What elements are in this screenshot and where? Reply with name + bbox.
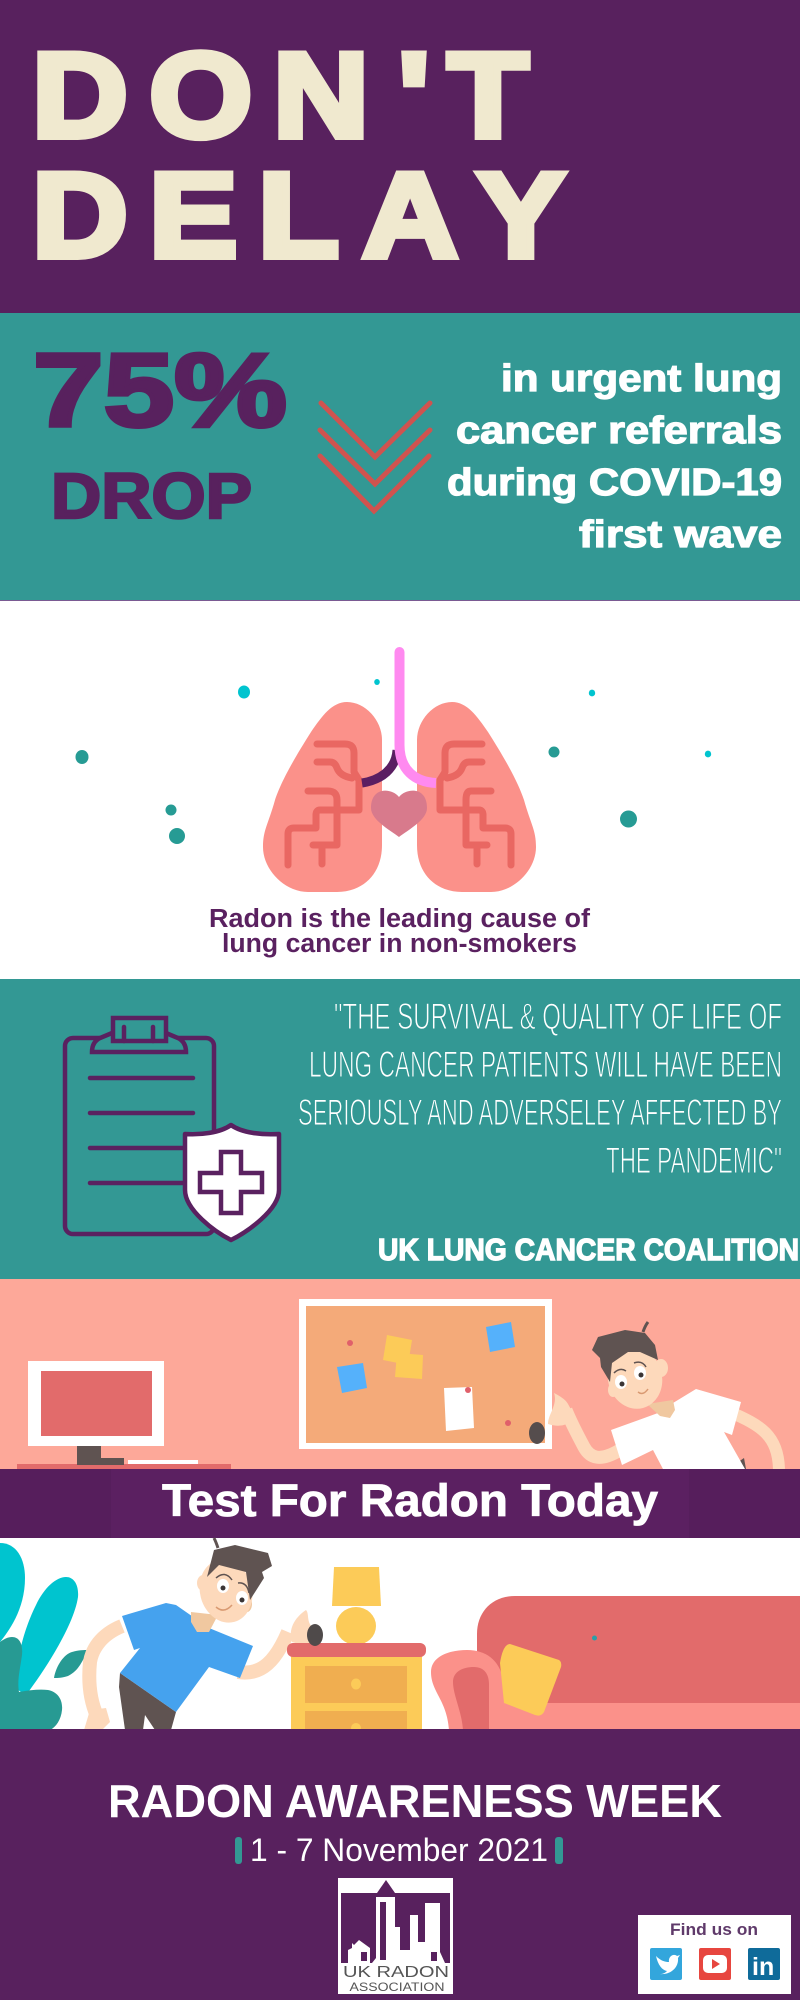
- logo: UK Radon Association: [338, 1878, 453, 1994]
- icon: twitter: [650, 1948, 682, 1980]
- panel: room scene bottom: [0, 1538, 800, 1733]
- logo: UK Radon Association: UK RADON: [343, 1964, 449, 1981]
- panel: quote: [0, 979, 800, 1279]
- social card: Find us on: [670, 1920, 758, 1939]
- panel: lungs: [0, 600, 800, 979]
- social card: [638, 1915, 791, 1994]
- band: test for radon: Test For Radon Today: [162, 1475, 658, 1526]
- text: referrals statement: first wave: [579, 514, 782, 556]
- title line: DON'T: DON'T: [32, 28, 528, 162]
- text: referrals statement: [447, 358, 782, 556]
- caption: radon leading cause: lung cancer in non-smokers: [222, 930, 577, 958]
- heading: radon awareness week: RADON AWARENESS WEEK: [108, 1775, 722, 1827]
- illustration: man at noticeboard: [529, 1322, 779, 1469]
- illustration: computer desk: [17, 1361, 231, 1469]
- illustration: plants: [0, 1543, 89, 1730]
- icon: linkedin: in: [752, 1953, 774, 1981]
- caption: radon leading cause: Radon is the leading cause of: [209, 905, 591, 933]
- illustration: sofa: [431, 1596, 800, 1730]
- illustration: bedside table with lamp: [287, 1567, 426, 1733]
- text: referrals statement: cancer referrals: [456, 410, 782, 452]
- stat label: DROP: DROP: [51, 460, 252, 532]
- icon: lungs: [263, 647, 536, 892]
- logo: UK Radon Association: ASSOCIATION: [350, 1982, 444, 1994]
- icon: medical shield: [185, 1125, 279, 1240]
- stat: 75%: 75%: [33, 333, 287, 449]
- text: referrals statement: in urgent lung: [501, 358, 782, 400]
- band: test for radon: [0, 1469, 800, 1538]
- panel: 75% drop: [0, 313, 800, 600]
- icon: clipboard: [65, 1018, 214, 1234]
- panel: footer: [0, 1729, 800, 2000]
- particles: [76, 679, 711, 844]
- text: referrals statement: during COVID-19: [447, 462, 782, 504]
- caption: radon leading cause: [209, 905, 591, 958]
- icon: down chevrons: [320, 403, 430, 511]
- panel: room scene top: [0, 1279, 800, 1469]
- illustration: noticeboard: [299, 1299, 552, 1449]
- icon: linkedin: [748, 1948, 780, 1981]
- icon: youtube: [699, 1948, 731, 1980]
- text: quote: [298, 996, 782, 1181]
- date with markers: 1 - 7 November 2021: [250, 1832, 548, 1868]
- title line: DELAY: DELAY: [32, 148, 565, 282]
- illustration: man at bedside: [84, 1538, 316, 1732]
- panel: title: [0, 0, 800, 313]
